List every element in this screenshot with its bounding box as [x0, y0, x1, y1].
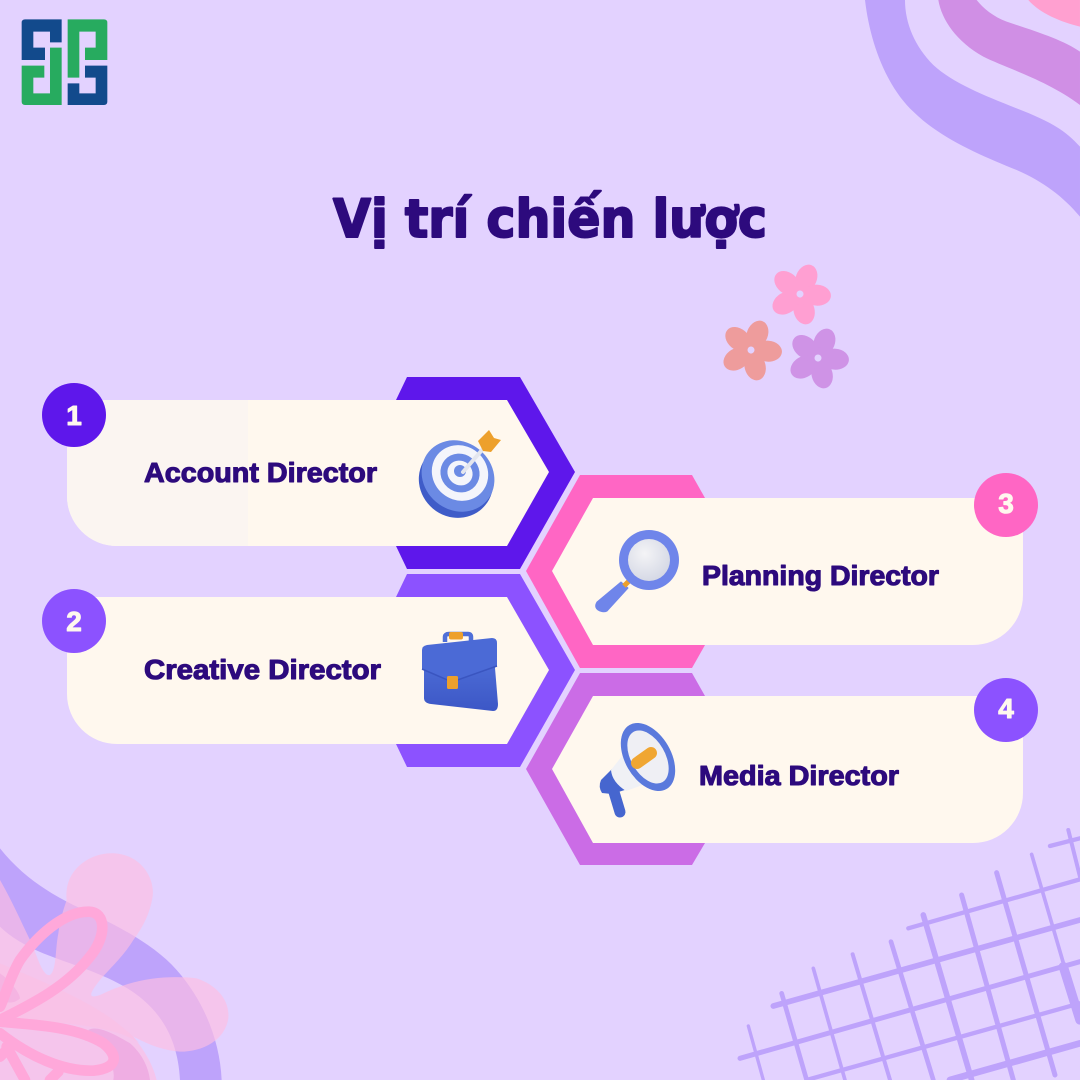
- label: Account Director: Account Director: [144, 457, 377, 488]
- badge: 4: 4: [998, 693, 1014, 724]
- hexagon frame: Planning Director: [526, 475, 705, 668]
- logo: [22, 19, 107, 105]
- panel: Account Director: [67, 377, 575, 569]
- label: Creative Director: Creative Director: [144, 654, 381, 685]
- hexagon frame: Creative Director: [396, 574, 575, 767]
- badge: 3: 3: [998, 488, 1014, 519]
- card: Media Director: [552, 696, 1023, 843]
- decoration: top-right waves: [865, 0, 1080, 217]
- badge: 1: [42, 383, 106, 447]
- card: Account Director: [67, 400, 549, 546]
- badge: 4: [974, 678, 1038, 742]
- icon: megaphone: [600, 713, 686, 812]
- icon: target with arrow: [404, 426, 509, 533]
- badge: 1: 1: [66, 400, 82, 431]
- panel: Media Director: [526, 673, 1023, 865]
- card: Planning Director: [552, 498, 1023, 645]
- icon: magnifying glass: [596, 530, 679, 612]
- card: Creative Director: [67, 597, 549, 744]
- panel: Creative Director: [67, 574, 575, 767]
- icon: briefcase: [422, 632, 498, 711]
- hexagon frame: Account Director: [396, 377, 575, 569]
- label: Media Director: Media Director: [699, 760, 899, 791]
- decoration: bottom-left flower and waves: [0, 848, 228, 1080]
- badge: 2: 2: [66, 606, 82, 637]
- decoration: bottom-right grid: [740, 830, 1080, 1080]
- decoration: three flowers: [709, 253, 860, 399]
- title: Vị trí chiến lược: [333, 189, 767, 250]
- hexagon frame: Media Director: [526, 673, 705, 865]
- badge: 2: [42, 589, 106, 653]
- label: Planning Director: Planning Director: [702, 560, 939, 591]
- panel: Planning Director: [526, 475, 1023, 668]
- badge: 3: [974, 473, 1038, 537]
